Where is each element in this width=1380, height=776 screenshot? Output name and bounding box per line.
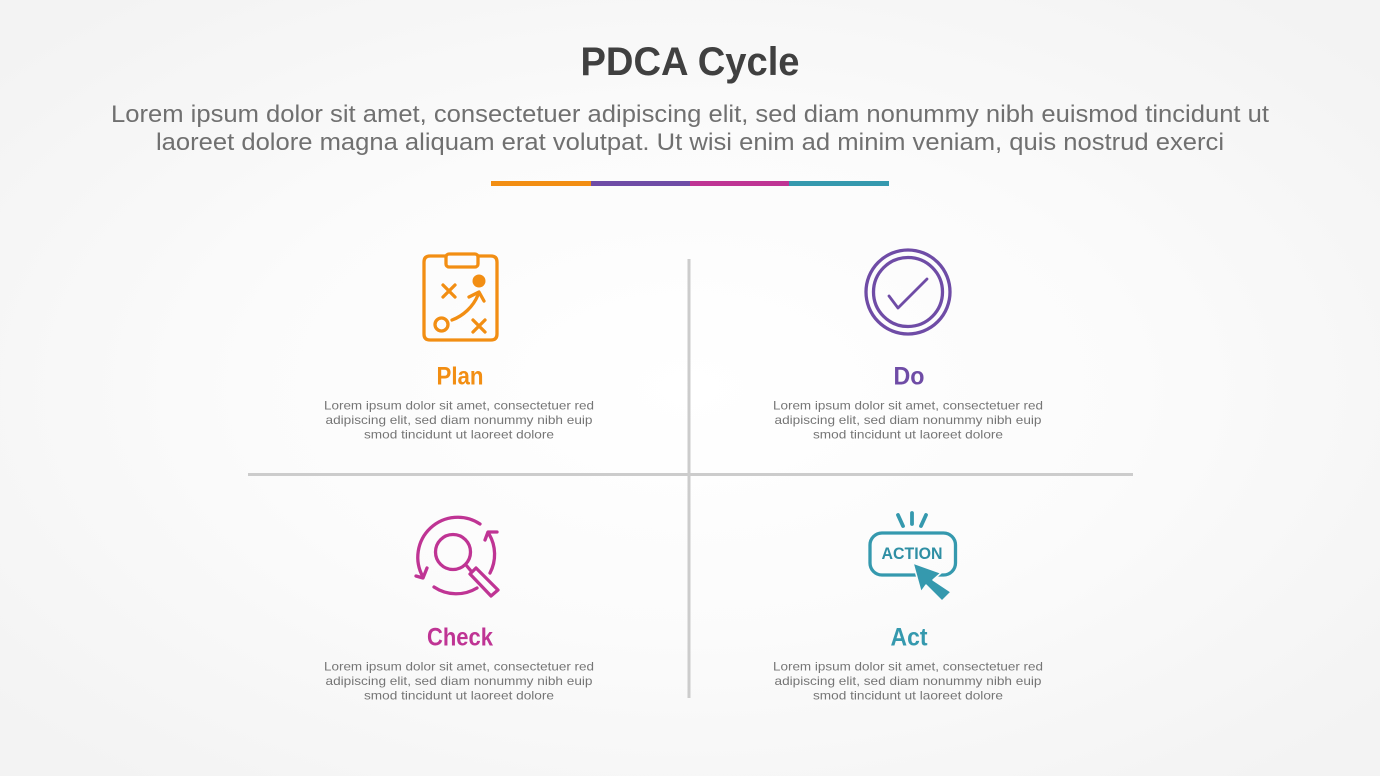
icon: clipboard with strategy play	[424, 254, 497, 340]
text block: act: smod tincidunt ut laoreet dolore	[813, 688, 1003, 702]
text block: do: Lorem ipsum dolor sit amet, consectetuer red	[773, 398, 1043, 412]
heading: plan: Plan	[436, 362, 484, 390]
subtitle text block	[111, 101, 1269, 156]
subtitle text block: laoreet dolore magna aliquam erat volutpat. Ut wisi enim ad minim veniam, quis nostrud exerci	[156, 129, 1224, 156]
icon: check mark in double circle	[866, 250, 950, 334]
four-colour divider bar	[491, 181, 889, 186]
text block: check: adipiscing elit, sed diam nonummy nibh euip	[326, 674, 593, 688]
text block: do: smod tincidunt ut laoreet dolore	[813, 428, 1003, 442]
heading: check: Check	[427, 624, 493, 652]
text block: plan: Lorem ipsum dolor sit amet, consectetuer red	[324, 398, 594, 412]
text block: do	[773, 398, 1043, 442]
text block: check: smod tincidunt ut laoreet dolore	[364, 688, 554, 702]
panel: act	[773, 513, 1043, 702]
panel: plan	[324, 254, 594, 442]
panel: check	[324, 517, 594, 702]
text block: plan	[324, 398, 594, 442]
quadrant cross lines	[248, 259, 1133, 698]
heading: do: Do	[894, 362, 924, 390]
icon: magnifier in circular arrows	[416, 517, 498, 596]
panel: do	[773, 250, 1043, 442]
icon: action button with cursor	[870, 513, 956, 601]
text block: act: Lorem ipsum dolor sit amet, consectetuer red	[773, 660, 1043, 674]
icon: action button with cursor: ACTION	[882, 545, 942, 563]
text block: check: Lorem ipsum dolor sit amet, consectetuer red	[324, 660, 594, 674]
text block: act: adipiscing elit, sed diam nonummy nibh euip	[774, 674, 1042, 688]
text block: plan: smod tincidunt ut laoreet dolore	[364, 428, 554, 442]
title: PDCA Cycle	[580, 40, 800, 84]
text block: plan: adipiscing elit, sed diam nonummy nibh euip	[326, 413, 593, 427]
text block: do: adipiscing elit, sed diam nonummy nibh euip	[774, 413, 1042, 427]
text block: act	[773, 660, 1043, 702]
heading: act: Act	[890, 624, 928, 652]
text block: check	[324, 660, 594, 702]
subtitle text block: Lorem ipsum dolor sit amet, consectetuer adipiscing elit, sed diam nonummy nibh euismod tincidunt ut	[111, 101, 1269, 128]
